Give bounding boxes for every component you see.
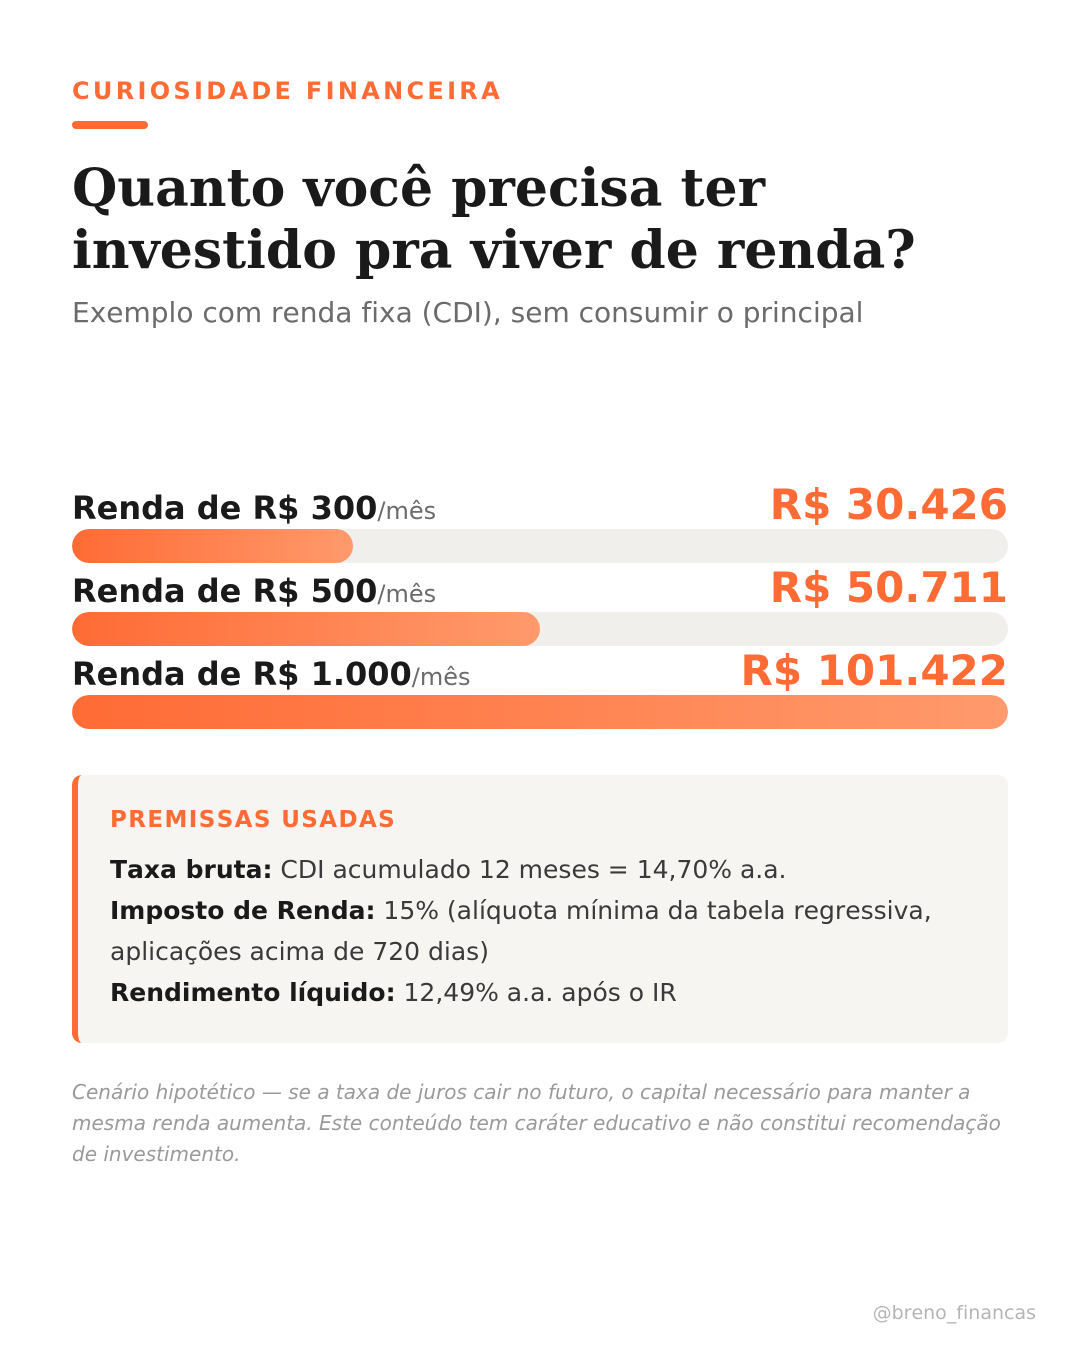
row: renda 300	[72, 480, 1008, 563]
disclaimer note: mesma renda aumenta. Este conteúdo tem caráter educativo e não constitui recomendação	[72, 1111, 1001, 1135]
disclaimer note	[72, 1080, 1001, 1166]
label 300: Renda de R$ 300/mês	[72, 489, 436, 527]
bar 1000	[72, 695, 1008, 729]
assumptions list	[110, 855, 932, 1007]
title: investido pra viver de renda?	[72, 220, 916, 281]
label 500: Renda de R$ 500/mês	[72, 572, 436, 610]
value 1000: R$ 101.422	[741, 646, 1008, 695]
bar 500	[72, 612, 1008, 646]
disclaimer note: de investimento.	[72, 1142, 240, 1166]
handle: @breno_financas	[873, 1302, 1036, 1324]
row: renda 500	[72, 563, 1008, 646]
row: renda 1000	[72, 646, 1008, 729]
accent rule	[72, 121, 148, 129]
panel heading: PREMISSAS USADAS	[110, 807, 396, 833]
assumptions list: Rendimento líquido: 12,49% a.a. após o IR	[110, 978, 677, 1007]
panel: premissas	[72, 775, 1008, 1043]
subtitle: Exemplo com renda fixa (CDI), sem consumir o principal	[72, 296, 863, 329]
bar 300	[72, 529, 1008, 563]
label 1000: Renda de R$ 1.000/mês	[72, 655, 471, 693]
value 500: R$ 50.711	[770, 563, 1008, 612]
eyebrow label: CURIOSIDADE FINANCEIRA	[72, 77, 503, 105]
title: Quanto você precisa ter	[72, 158, 765, 219]
title	[72, 158, 916, 281]
value 300: R$ 30.426	[770, 480, 1008, 529]
assumptions list: Taxa bruta: CDI acumulado 12 meses = 14,70% a.a.	[110, 855, 786, 884]
disclaimer note: Cenário hipotético — se a taxa de juros cair no futuro, o capital necessário para manter a	[72, 1080, 970, 1104]
assumptions list: Imposto de Renda: 15% (alíquota mínima da tabela regressiva,	[110, 896, 932, 925]
assumptions list: aplicações acima de 720 dias)	[110, 937, 489, 966]
